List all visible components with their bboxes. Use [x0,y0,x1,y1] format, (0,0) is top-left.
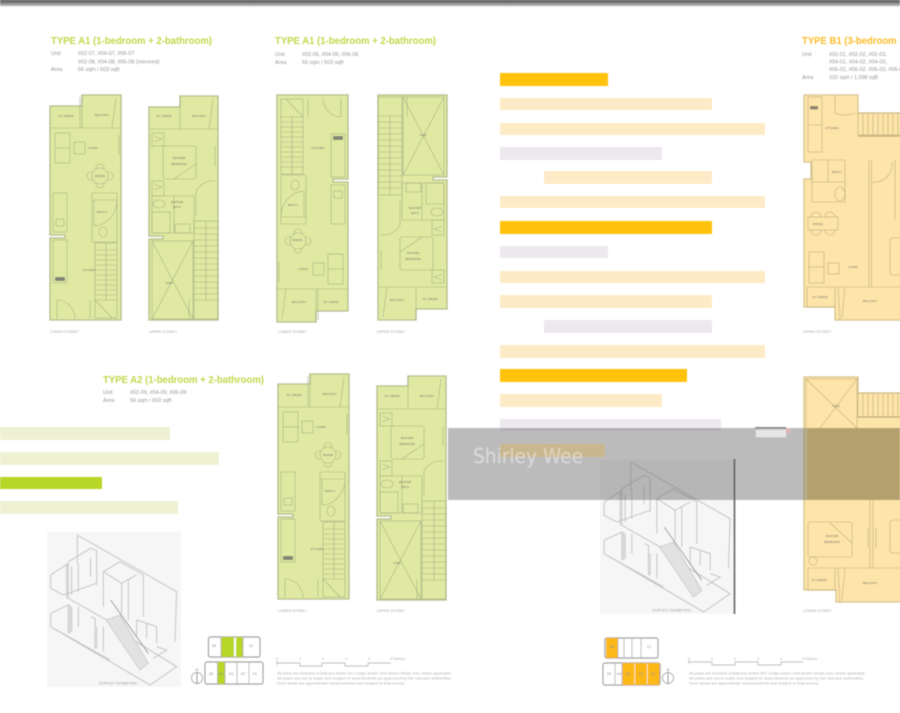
plan: A1 centre lower storey: BATH 2 [288,203,298,207]
isometric drawing: type B [600,459,734,614]
redacted text bars: centre column [500,73,765,431]
scale bar: type B: 4 [780,656,783,661]
plan: A1 left upper storey [149,96,218,320]
heading: type A1 centre [275,36,436,66]
caption: upper storey: UPPER STOREY [149,330,178,334]
plan: A2 upper storey [377,376,446,600]
plan: A1 left lower storey: BALCONY [95,113,109,117]
plan: B1 lower storey: AC LEDGE [811,578,827,582]
heading: type A1 centre: 56 sqm / 603 sqft [302,60,344,66]
plan: A1 left lower storey: AC LEDGE [58,114,74,118]
plan: B1 lower storey [804,377,900,602]
key plan: type A: 06 [212,643,217,648]
plan: A1 left upper storey: AC LEDGE [156,114,172,118]
key plan: type A [205,637,263,684]
heading: type A1 left: Unit [51,51,61,57]
plan: A1 centre upper storey [378,95,447,320]
plan: A1 centre upper storey: MASTER [407,251,420,255]
plan: A1 centre lower storey: LIVING [298,267,309,271]
plan: B1 lower storey: VOID [832,404,840,408]
plan: A2 lower storey: DINING [323,453,334,457]
plan: A2 upper storey: MASTER [401,436,414,440]
plan: A2 upper storey: BALCONY [420,394,434,398]
heading: type A2: Area [103,398,114,404]
key plan: type A: 01 [253,671,258,676]
plan: A2 upper storey: VOID [393,561,401,565]
plan: A1 centre upper storey: MASTER [409,206,422,210]
key plan: type B: 04 [617,671,622,676]
heading: type A1 centre: TYPE A1 (1-bedroom + 2-bathroom) [275,36,436,47]
key plan: type A: 02 [241,671,246,676]
plan: A2 upper storey: BATH [401,485,409,489]
scale bar: type B: 5 Metres [802,656,817,661]
plan: A2 lower storey: BATH 2 [325,489,335,493]
heading: type A2: TYPE A2 (1-bedroom + 2-bathroom) [103,375,264,386]
heading: type A1 left [51,36,212,73]
caption: lower storey: LOWER STOREY [278,609,307,613]
plan: A1 left lower storey: BATH 2 [97,210,107,214]
caption: upper storey: UPPER STOREY [377,609,406,613]
key plan: type A: 04 [219,671,224,676]
key plan: type B: 12 [647,644,652,649]
plan: A1 centre upper storey: VOID [419,133,427,137]
heading: type A1 left: 56 sqm / 603 sqft [78,67,120,73]
key plan: type B: 06 [610,644,615,649]
plan: A1 centre lower storey: BALCONY [292,300,306,304]
caption: lower storey: LOWER STOREY [50,330,79,334]
plan: A1 left lower storey: LIVING [88,146,99,150]
key plan: type A: 03 [229,671,234,676]
plan: B1 lower storey: BALCONY [863,581,877,585]
key plan: type B: 02 [639,671,644,676]
scale bar: type B: 0 [688,656,691,661]
heading: type A2: Unit [103,390,113,396]
key plan: type B [603,638,660,685]
heading: type A1 centre: Unit [275,52,285,58]
notes: type B [689,670,866,686]
notes: type A [277,670,452,686]
plan: A2 lower storey: BALCONY [323,392,337,396]
plan: A1 left upper storey: MASTER [173,156,186,160]
heading: type A2: 56 sqm / 603 sqft [130,398,172,404]
plan: A2 upper storey: MASTER [399,480,412,484]
plan: A1 left upper storey: VOID [165,281,173,285]
scale bar: type A: 2 [322,656,324,661]
compass: type B [662,667,674,684]
vertical divider line [734,459,735,614]
heading: type A1 left: Area [51,67,62,73]
scale bar: type A: 0 [276,656,279,661]
plan: B1 lower storey: MASTER [826,534,839,538]
heading: type B1: #04-01, #04-02, #04-03, [829,60,887,66]
scale bar: type A [276,656,405,666]
plan: A2 lower storey: AC LEDGE [286,393,302,397]
plan: A1 left upper storey: BEDROOM [171,162,187,166]
caption: lower storey: LOWER STOREY [803,609,832,613]
heading: type A1 centre: Area [275,60,286,66]
plan: A1 left upper storey: MASTER [171,200,184,204]
caption: upper storey: UPPER STOREY [803,330,832,334]
compass: type B: N [667,667,670,672]
plan: A1 left lower storey: KITCHEN [82,268,96,272]
key plan: type B: 03 [626,671,631,676]
plan: A2 lower storey [278,374,349,599]
isometric drawing: type A [47,532,181,687]
top edge strip [0,0,900,7]
redacted text bars: left column [0,427,219,514]
scale bar: type B: 1 [711,656,713,661]
heading: type A2: #02-09, #04-09, #06-09 [130,390,186,396]
plan: B1 upper storey: BALCONY [863,299,877,303]
key plan: type A: 05 [209,671,214,676]
scale bar: type B: 2 [734,656,736,661]
heading: type B1 [802,36,900,81]
plan: B1 upper storey: DINING [813,222,824,226]
isometric drawing: type A: DUPLEX ISOMETRIC [99,681,138,686]
heading: type B1: Area [802,75,813,81]
plan: A2 upper storey: AC LEDGE [384,394,400,398]
caption: lower storey: LOWER STOREY [278,330,307,334]
heading: type B1: #02-01, #02-02, #02-03, [829,52,887,58]
plan: A1 left lower storey [50,95,121,320]
heading: type B1: 102 sqm / 1,098 sqft [829,75,878,81]
heading: type A2 [103,375,264,404]
scale bar: type A: 4 [368,656,371,661]
watermark band [448,427,900,500]
key plan: type A: 12 [249,643,254,648]
compass: type A: N [196,667,199,672]
notes: type B: All plans are inclusive of Balcony and/or A/C Ledge and/or Void and/or Strata void, where applicable. [689,670,866,676]
key plan: type B: 01 [651,671,656,676]
notes: type A: All plans are inclusive of Balcony and/or A/C Ledge and/or Void and/or Strata void, where applicable. [277,670,452,676]
plan: A1 centre lower storey: KITCHEN [311,146,325,150]
heading: type B1: Unit [802,52,812,58]
notes: type B: Floor areas are approximate measurements and subject to final survey. [689,680,819,686]
scale bar: type A: 1 [299,656,301,661]
plan: A1 centre lower storey: AC LEDGE [323,300,339,304]
plan: A2 upper storey: BEDROOM [399,442,415,446]
scale bar: type A: 5 Metres [390,656,405,661]
key plan: type B: 05 [607,671,612,676]
plan: A1 centre lower storey: DINING [292,238,303,242]
plan: A1 left upper storey: BATH [173,205,181,209]
plan: A1 centre upper storey: AC LEDGE [422,297,438,301]
compass: type A [192,667,202,684]
plan: B1 upper storey [804,95,900,320]
plan: A1 centre lower storey [277,95,348,322]
notes: type A: All plans are not to scale and subject to amendments as approved by the relevant authorities. [277,676,452,680]
plan: A1 left upper storey: BALCONY [192,114,206,118]
plan: A1 left lower storey: DINING [95,174,106,178]
notes: type B: All plans are not to scale and subject to amendments as approved by the relevant authorities. [689,676,864,680]
watermark band: Shirley Wee [473,444,583,468]
plan: A2 lower storey: KITCHEN [310,547,324,551]
scale bar: type B: 3 [757,656,759,661]
isometric drawing: type B: DUPLEX ISOMETRIC [652,608,692,613]
plan: A1 centre upper storey: BATH [411,211,419,215]
plan: B1 lower storey: BEDROOM [824,540,840,544]
plan: B1 upper storey: AC LEDGE [812,295,828,299]
scale bar: type A: 3 [345,656,347,661]
plan: A2 lower storey: LIVING [316,425,327,429]
heading: type A1 centre: #02-06, #04-06, #06-06 [302,52,358,58]
plan: B1 upper storey: BATH 1 [832,170,842,174]
heading: type A1 left: #02-07, #04-07, #06-07 [78,51,134,57]
notes: type A: Floor areas are approximate measurements and subject to final survey. [277,680,405,686]
plan: A1 centre upper storey: BEDROOM [405,257,421,261]
plan: B1 upper storey: LIVING [848,265,859,269]
plan: A1 centre upper storey: BALCONY [390,298,404,302]
heading: type A1 left: TYPE A1 (1-bedroom + 2-bathroom) [51,36,212,47]
scale bar: type B [688,656,817,665]
heading: type A1 left: #02-08, #04-08, #06-08 (mirrored) [78,60,160,66]
plan: B1 upper storey: KITCHEN [825,126,839,130]
caption: upper storey: UPPER STOREY [377,330,406,334]
